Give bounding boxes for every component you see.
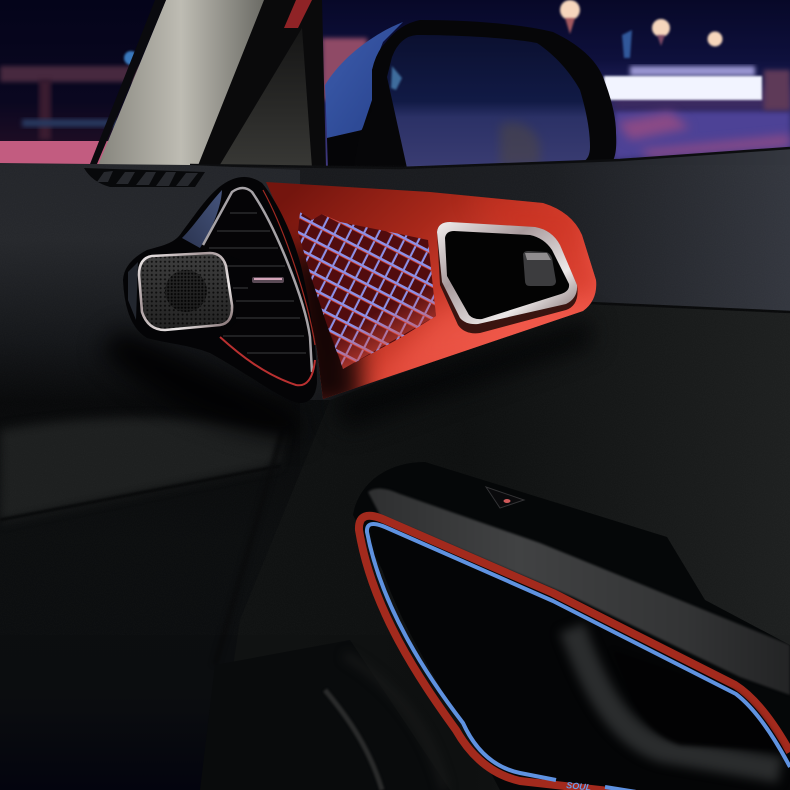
vent adjuster tab <box>252 277 284 283</box>
window: left view <box>0 0 175 170</box>
lower left armrest <box>0 418 285 522</box>
side mirror <box>325 20 616 172</box>
armrest ridge <box>368 488 790 695</box>
panel highlights and shading <box>290 195 600 410</box>
surface grain texture <box>0 165 790 635</box>
A-pillar <box>90 0 326 168</box>
vent opening <box>203 189 312 384</box>
mirror frame <box>353 20 616 172</box>
chrome surround <box>437 222 577 324</box>
left door panel <box>0 163 300 790</box>
mirror glass <box>387 35 590 168</box>
shadow below vent <box>100 330 300 440</box>
red trim line <box>359 516 790 790</box>
vent chrome ring <box>203 188 312 372</box>
mirror lower mount <box>327 100 400 170</box>
dashboard air slots <box>84 168 205 187</box>
diamond lattice pattern <box>298 212 436 369</box>
door armrest <box>353 462 790 790</box>
handle lever <box>523 251 556 286</box>
armrest top pad <box>353 462 790 790</box>
mirror shell <box>325 22 403 138</box>
window: right night view <box>318 0 790 170</box>
speaker grille <box>139 253 232 330</box>
vent gloss <box>182 190 222 248</box>
handle shadow <box>437 222 578 333</box>
air vent <box>123 177 317 403</box>
right door panel <box>0 303 790 790</box>
vent housing <box>123 177 317 403</box>
window switch <box>486 487 524 508</box>
door handle <box>437 222 578 333</box>
blue light line <box>367 524 790 780</box>
red door trim panel <box>266 182 600 410</box>
speaker mesh <box>370 525 790 790</box>
door pull recess <box>612 650 782 750</box>
vent slats <box>209 213 306 353</box>
handle recess <box>445 231 569 319</box>
lattice fade <box>298 212 436 369</box>
door pull <box>572 628 780 770</box>
dashboard upper surface <box>190 148 790 400</box>
